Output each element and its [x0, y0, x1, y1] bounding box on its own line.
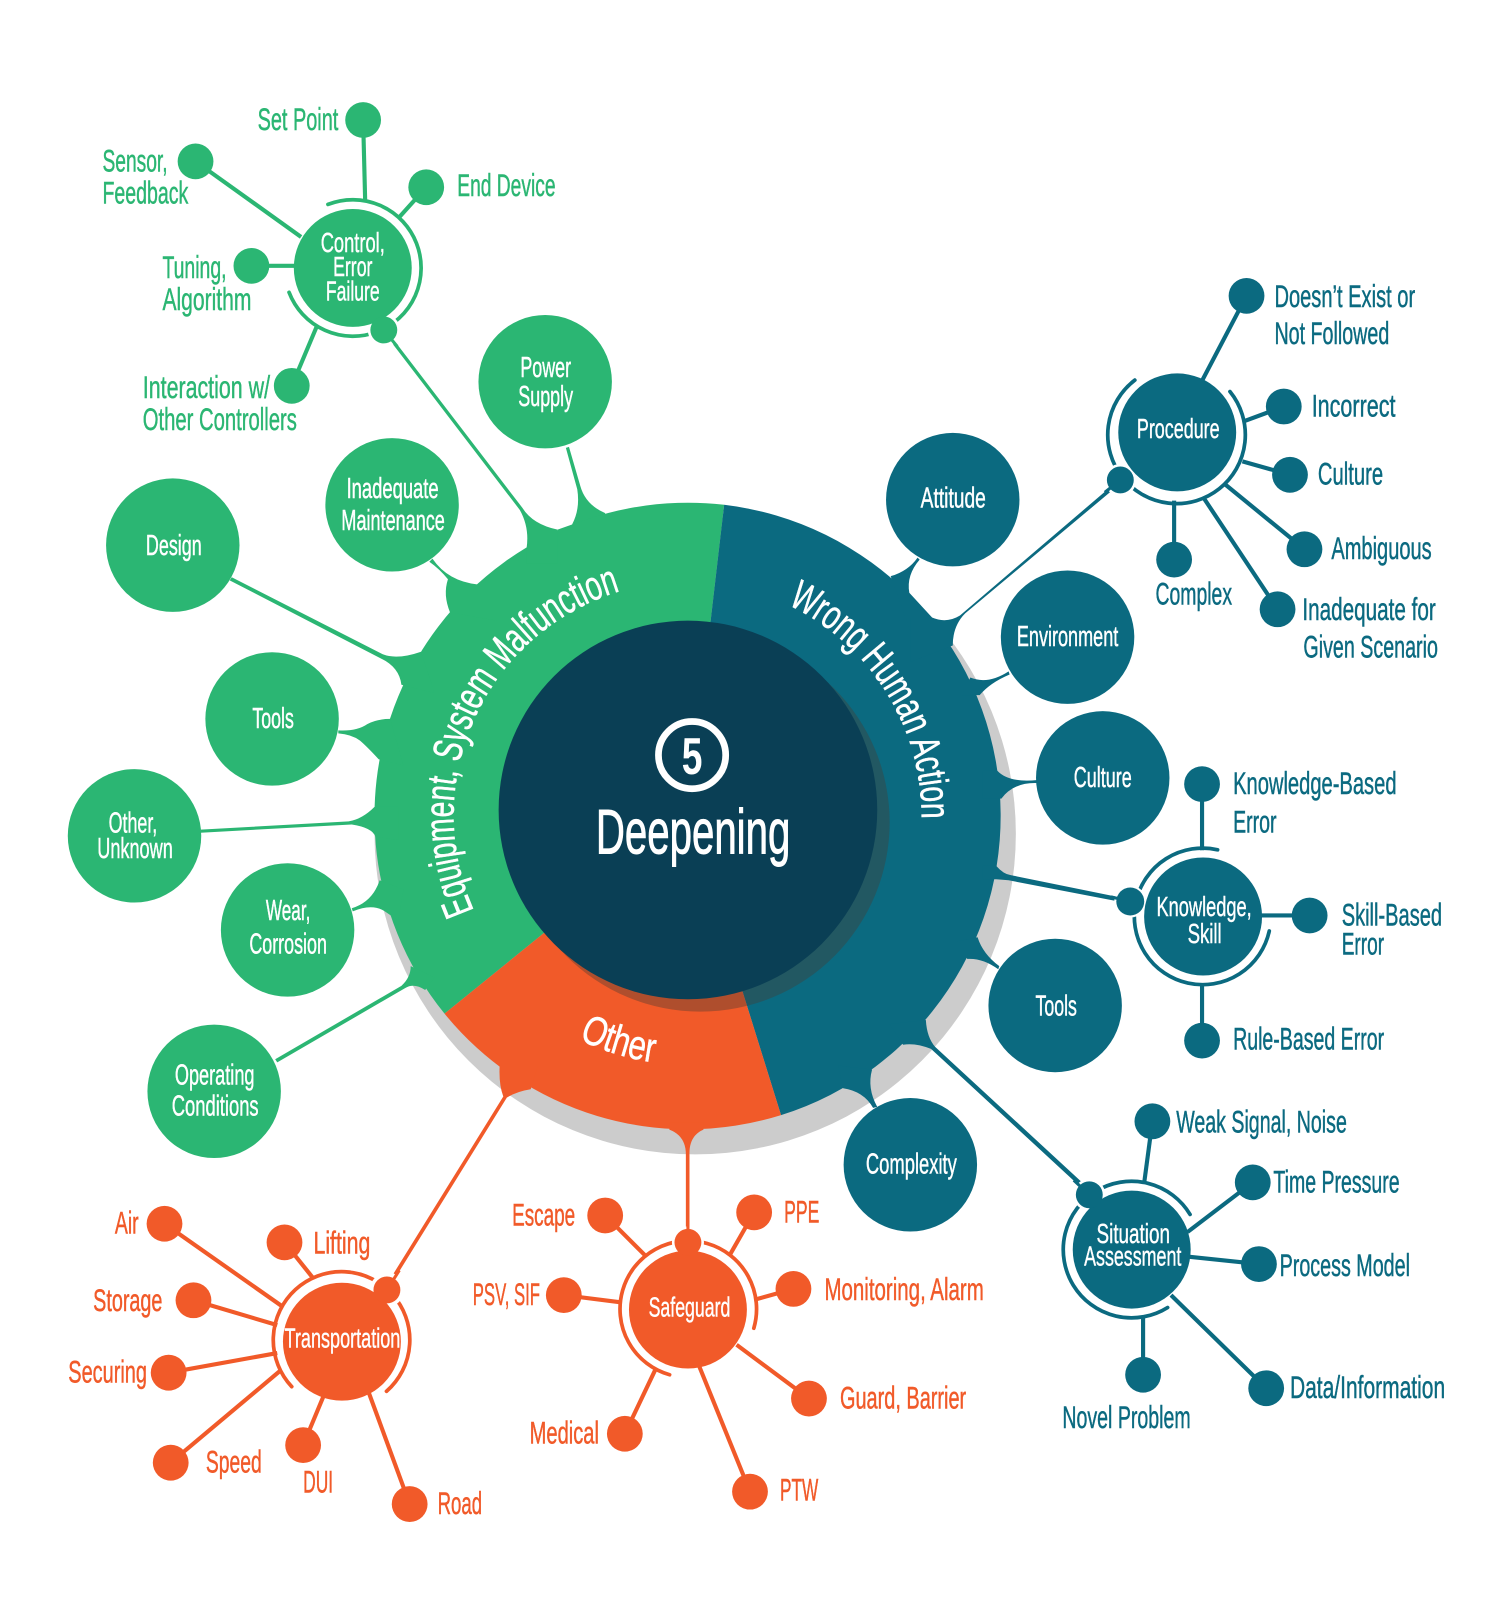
leaf: Tuning, Algorithm [162, 248, 298, 317]
leaf: Speed [153, 1371, 280, 1481]
circle: Culture [1036, 711, 1169, 845]
segment: Wrong Human Action [688, 488, 1122, 1185]
hub ring [1063, 1181, 1190, 1318]
connector stub [1111, 897, 1130, 902]
circle: Other, Unknown: Other, [109, 807, 157, 839]
leaf: DUI [285, 1395, 333, 1499]
center circle [499, 621, 877, 999]
icon: number 5 badge [658, 722, 726, 789]
connector stub [1074, 1180, 1089, 1195]
circle: Wear, Corrosion: Wear, [266, 895, 310, 927]
segment: Other [394, 816, 781, 1275]
leaf: Skill-Based Error [1260, 897, 1442, 961]
circle: Other, Unknown [68, 769, 201, 903]
leaf: PTW [699, 1366, 819, 1510]
ring label: Equipment, System Malfunction: Equipment, System Malfunction [428, 572, 619, 920]
hub ring [1134, 848, 1269, 985]
leaf: PSV, SIF: PSV, SIF [473, 1277, 540, 1312]
hub gap [1073, 1179, 1105, 1211]
leaf: Speed: Speed [206, 1445, 262, 1480]
leaf: Tuning, Algorithm: Tuning, [162, 250, 227, 285]
hub gap [672, 1226, 704, 1258]
hub circle: Control, [321, 227, 385, 258]
leaf: Weak Signal, Noise [1135, 1103, 1347, 1183]
leaf: Sensor, Feedback: Sensor, [102, 143, 168, 178]
leaf: Ambiguous: Ambiguous [1331, 531, 1432, 566]
leaf: Process Model: Process Model [1280, 1248, 1410, 1283]
hub circle: Failure [326, 276, 380, 307]
leaf: Culture [1242, 457, 1383, 493]
leaf: Weak Signal, Noise: Weak Signal, Noise [1176, 1104, 1347, 1139]
panel: Safeguard hub [473, 1194, 984, 1510]
leaf: End Device: End Device [457, 168, 556, 203]
hub ring [289, 200, 421, 336]
leaf: PTW: PTW [780, 1473, 819, 1508]
leaf: Lifting [267, 1224, 370, 1279]
circle: Operating Conditions: Operating [175, 1060, 255, 1092]
leaf: Air: Air [115, 1206, 139, 1241]
leaf: Incorrect [1244, 388, 1396, 424]
gray drop shadow of main ring [374, 513, 1016, 1154]
leaf: Time Pressure: Time Pressure [1273, 1164, 1400, 1199]
leaf: Doesn't Exist or Not Followed [1201, 278, 1415, 383]
connector stub [1105, 480, 1120, 492]
connector dot [1116, 888, 1144, 915]
title: Deepening [596, 797, 790, 867]
hub circle [1118, 373, 1236, 491]
connector dot [370, 317, 397, 343]
circle: Environment [1001, 570, 1134, 704]
hub circle [629, 1251, 747, 1369]
leaf: Incorrect: Incorrect [1312, 388, 1396, 423]
circle: Attitude [886, 433, 1019, 566]
hub gap [1114, 885, 1146, 918]
hub gap [370, 1273, 404, 1307]
circle: Complexity: Complexity [866, 1149, 957, 1181]
connector dot [373, 1276, 400, 1303]
leaf: Novel Problem [1062, 1316, 1191, 1435]
leaf: Doesn't Exist or Not Followed: Not Followed [1274, 316, 1389, 351]
hub circle: Situation [1097, 1218, 1170, 1249]
circle: Attitude: Attitude [921, 482, 986, 514]
leaf: Knowledge-Based Error [1184, 766, 1397, 850]
circle: Power Supply: Supply [518, 381, 573, 413]
panel: Transportation hub [68, 1206, 482, 1522]
circle: Inadequate Maintenance [325, 438, 459, 572]
segment: Equipment, System Malfunction [201, 342, 724, 1062]
circle: Operating Conditions [147, 1025, 281, 1158]
hub circle: Safeguard [649, 1291, 730, 1322]
icon: number 5 badge: 5 [682, 727, 702, 785]
leaf: Rule-Based Error: Rule-Based Error [1233, 1022, 1384, 1057]
leaf: Lifting: Lifting [313, 1225, 370, 1260]
hub ring [620, 1241, 757, 1375]
hub circle: Procedure [1137, 413, 1220, 444]
leaf: DUI: DUI [303, 1464, 333, 1499]
circle: Inadequate Maintenance: Maintenance [341, 505, 445, 537]
panel: Procedure hub [1104, 278, 1438, 664]
connector stub [387, 1270, 399, 1290]
circle: Wear, Corrosion [221, 863, 354, 997]
leaf: Process Model [1190, 1246, 1410, 1283]
circle: Wear, Corrosion: Corrosion [249, 928, 327, 960]
hub gap [368, 314, 400, 346]
panel: Knowledge, Skill hub [1111, 766, 1442, 1059]
panel: Situation Assessment hub [1062, 1103, 1445, 1435]
panel: main ring with segments [201, 342, 1122, 1275]
circle: Tools (equipment) [205, 652, 339, 786]
circle: Environment: Environment [1017, 621, 1118, 653]
hub circle: Knowledge, [1157, 891, 1252, 922]
leaf: Escape [512, 1197, 646, 1256]
hub circle [1073, 1191, 1191, 1309]
leaf: PPE [729, 1194, 819, 1256]
circle: Inadequate Maintenance: Inadequate [347, 473, 439, 505]
hub circle: Assessment [1084, 1241, 1182, 1272]
hub circle [1144, 858, 1262, 975]
leaf: Securing: Securing [68, 1355, 147, 1390]
hub circle [294, 209, 412, 327]
leaf: Storage [93, 1282, 277, 1325]
leaf: Escape: Escape [512, 1197, 575, 1232]
ring label: Other: Other [584, 1016, 657, 1062]
leaf: Monitoring, Alarm [756, 1271, 984, 1307]
ring label: Wrong Human Action: Wrong Human Action [792, 579, 950, 818]
connector dot [1107, 467, 1134, 493]
leaf: Inadequate for Given Scenario: Inadequate for [1302, 592, 1436, 627]
circle: Complexity [844, 1098, 977, 1231]
leaf: Complex [1156, 501, 1232, 612]
leaf: Tuning, Algorithm: Algorithm [162, 282, 251, 317]
leaf: Interaction w/ Other Controllers: Other Controllers [143, 402, 297, 437]
hub ring [273, 1272, 410, 1391]
leaf: Set Point: Set Point [258, 102, 339, 137]
leaf: Air [115, 1206, 282, 1306]
leaf: PPE: PPE [784, 1194, 819, 1229]
leaf: Guard, Barrier: Guard, Barrier [840, 1380, 966, 1415]
leaf: Novel Problem: Novel Problem [1062, 1400, 1191, 1435]
leaf: Knowledge-Based Error: Knowledge-Based [1233, 766, 1397, 801]
leaf: Storage: Storage [93, 1283, 162, 1318]
circle: Design: Design [146, 530, 202, 562]
circle: Other, Unknown: Unknown [97, 833, 173, 865]
hub label: Transportation [285, 1322, 400, 1353]
leaf: Rule-Based Error [1184, 984, 1384, 1059]
leaf: Culture: Culture [1318, 457, 1383, 492]
leaf: Skill-Based Error: Error [1342, 926, 1384, 961]
leaf: Sensor, Feedback: Feedback [102, 175, 189, 210]
leaf: Monitoring, Alarm: Monitoring, Alarm [824, 1272, 984, 1307]
leaf: Sensor, Feedback [102, 143, 301, 237]
leaf: Guard, Barrier [737, 1345, 966, 1416]
hub circle: Skill [1188, 918, 1222, 949]
panel: Control, Error Failure hub [102, 102, 556, 437]
hub circle [283, 1283, 401, 1401]
circle: Tools (human): Tools [1036, 990, 1077, 1022]
circle: Power Supply: Power [520, 352, 571, 384]
leaf: Skill-Based Error: Skill-Based [1342, 897, 1442, 932]
leaf: Interaction w/ Other Controllers [143, 327, 317, 437]
circle: Tools (human) [988, 939, 1122, 1072]
leaf: Securing [68, 1353, 277, 1391]
leaf: Data/Information [1171, 1295, 1445, 1406]
leaf: Road [368, 1391, 482, 1522]
leaf: Time Pressure [1188, 1164, 1400, 1232]
leaf: Ambiguous [1225, 484, 1432, 567]
connector dot [674, 1229, 701, 1256]
hub gap [1104, 464, 1136, 496]
leaf: Inadequate for Given Scenario [1204, 499, 1438, 664]
circle: Culture: Culture [1074, 762, 1132, 794]
center shadow [511, 633, 890, 1012]
leaf: Knowledge-Based Error: Error [1233, 804, 1277, 839]
leaf: End Device [398, 168, 556, 218]
leaf: Medical: Medical [530, 1416, 599, 1451]
circle: Design [106, 478, 240, 612]
circle: Power Supply [478, 315, 612, 448]
circle: Operating Conditions: Conditions [172, 1091, 259, 1123]
leaf: Medical [530, 1369, 656, 1452]
leaf: Set Point [258, 102, 381, 202]
circle: Tools (equipment): Tools [252, 703, 294, 735]
leaf: Road: Road [438, 1486, 482, 1521]
connector stub [384, 330, 397, 347]
leaf: Complex: Complex [1156, 577, 1232, 612]
hub ring [1108, 380, 1245, 504]
hub circle: Error [333, 251, 372, 282]
connector stub [686, 1221, 689, 1242]
leaf: Doesn't Exist or Not Followed: Doesn’t Exist or [1274, 279, 1415, 314]
leaf: Interaction w/ Other Controllers: Interaction w/ [143, 370, 270, 405]
connector dot [1076, 1181, 1103, 1208]
